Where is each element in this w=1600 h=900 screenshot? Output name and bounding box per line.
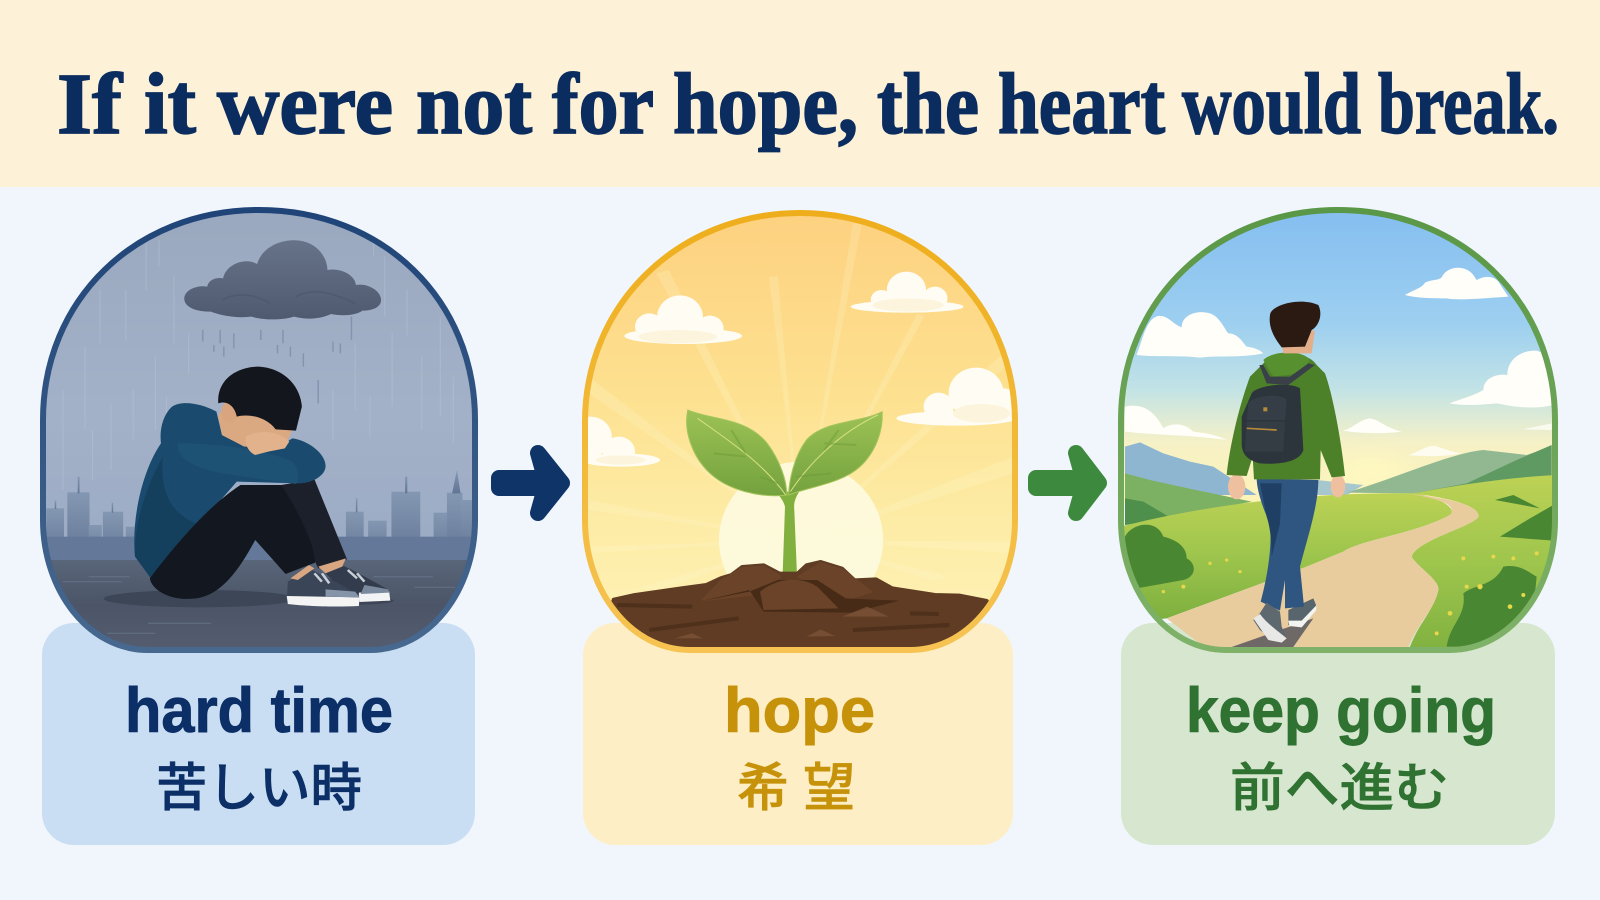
illustration: person sitting under rain cloud: [37, 203, 481, 660]
header band: [0, 0, 1600, 187]
pants: [150, 485, 315, 599]
arch border: hard time: [43, 210, 475, 650]
panel: hope: [569, 203, 1024, 845]
title: not: [416, 55, 532, 152]
wet ground: [51, 560, 467, 647]
label box: hard time: [42, 623, 475, 845]
arch border: keep going: [1121, 210, 1555, 650]
title: it: [144, 55, 196, 152]
caption: keep going: keep going: [1186, 676, 1496, 746]
path: [1167, 494, 1478, 657]
title: heart: [998, 55, 1165, 152]
skyline: [46, 470, 472, 537]
panel: keep going: [1113, 203, 1560, 845]
illustration: seedling and sunrise: [588, 216, 1012, 647]
caption: hope: [724, 676, 875, 818]
walker: [1232, 618, 1314, 647]
leaves: [687, 410, 787, 496]
clouds: [1125, 268, 1553, 456]
arrow: hard time to hope: [499, 453, 562, 513]
person: [104, 590, 296, 607]
near shoe, far shoe: [326, 566, 390, 601]
arch border: hope: [585, 213, 1015, 650]
label box: hope: [583, 623, 1013, 845]
caption: hard time: hard time: [125, 676, 393, 746]
title: would: [1182, 55, 1361, 152]
title: for: [552, 55, 654, 152]
stem: [780, 492, 799, 572]
sun: [719, 462, 884, 578]
caption: keep going: [1186, 676, 1496, 818]
caption: keep going: 前へ進む: [1230, 760, 1449, 818]
bushes: [1125, 495, 1553, 647]
panel: hard time: [37, 203, 481, 845]
left meadow: [1120, 493, 1452, 623]
title: were: [217, 55, 393, 152]
title: If: [57, 55, 123, 152]
hoodie: [134, 403, 326, 579]
caption: hard time: [125, 676, 393, 818]
backpack: [1259, 363, 1315, 385]
caption: hope: hope: [724, 676, 875, 746]
label box: keep going: [1121, 623, 1555, 845]
soil: [611, 560, 989, 647]
caption: hope: 希 望: [737, 760, 855, 818]
title: the: [877, 55, 979, 152]
right meadow: [1410, 475, 1552, 647]
title: [57, 55, 1559, 152]
title: hope,: [673, 55, 858, 152]
illustration: person walking on a path: [1113, 203, 1560, 663]
arrow: hope to keep going: [1036, 453, 1099, 513]
mountains and hills: [1125, 442, 1257, 495]
caption: hard time: 苦しい時: [156, 760, 362, 818]
cloud: [184, 240, 381, 319]
clouds: [569, 272, 1019, 467]
head and arms: [218, 409, 292, 447]
far leg: [281, 479, 347, 568]
